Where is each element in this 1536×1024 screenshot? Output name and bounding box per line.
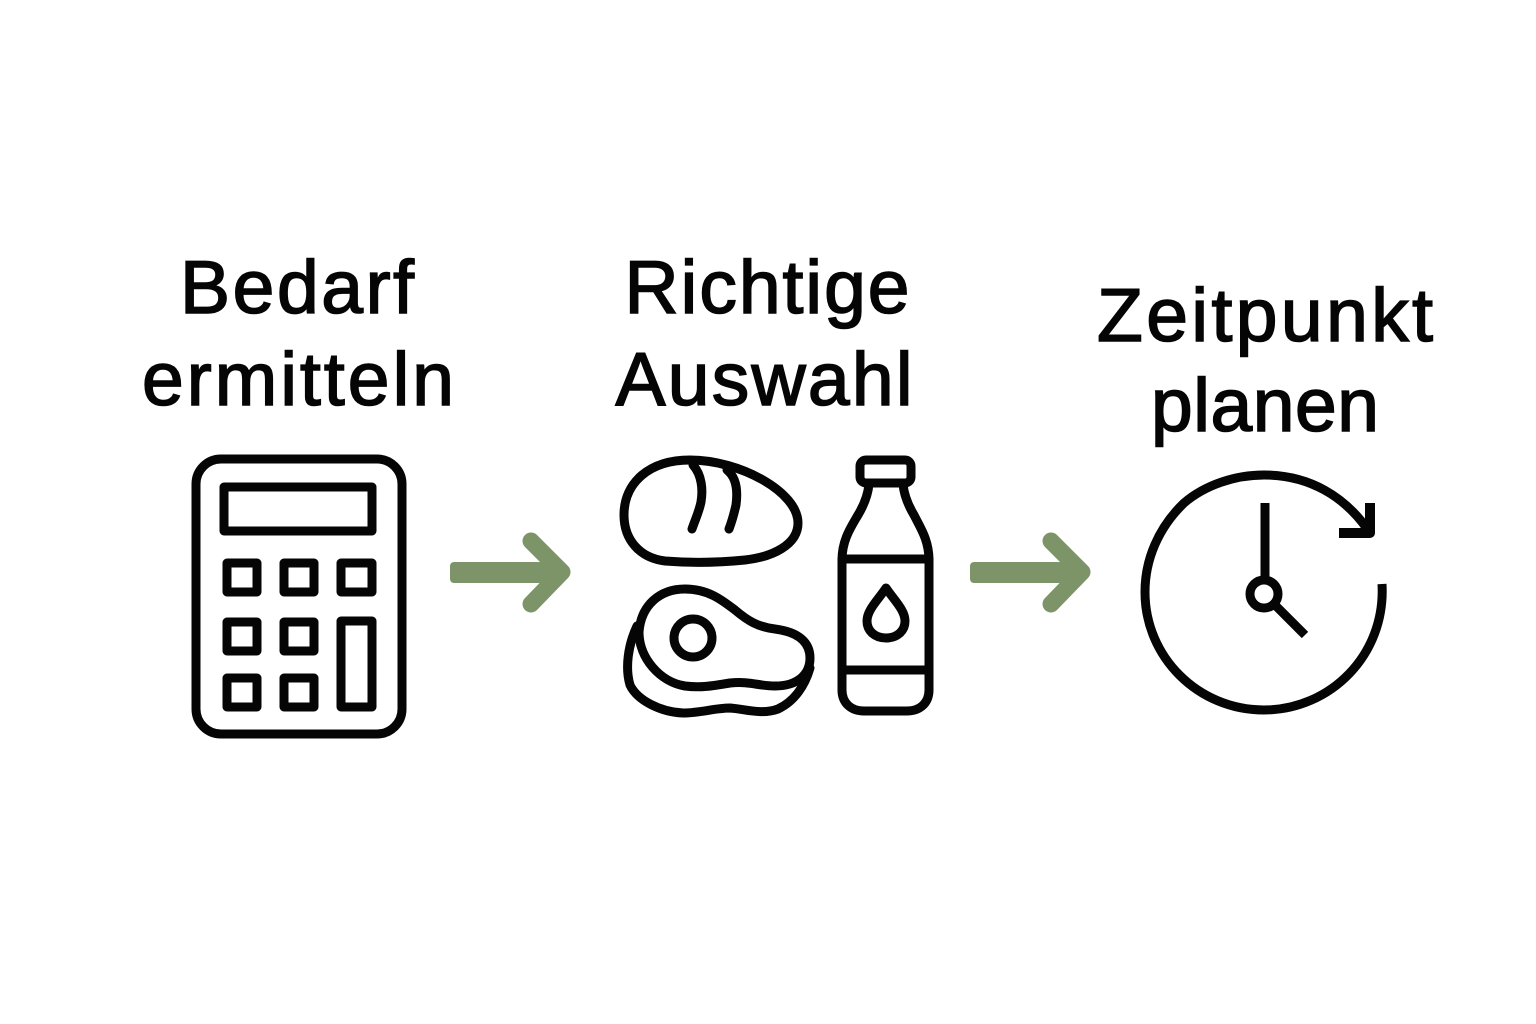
icon: bottle: [842, 460, 929, 711]
icon: calculator: [196, 459, 402, 734]
icon: clock with circular arrow: [1145, 475, 1382, 710]
arrow: step two to three: [970, 541, 1082, 604]
heading: Richtige Auswahl: Richtige: [624, 245, 910, 329]
heading: Richtige Auswahl: Auswahl: [616, 337, 912, 421]
heading: Richtige Auswahl: [616, 245, 912, 421]
arrow: step one to two: [450, 541, 562, 604]
heading: Bedarf ermitteln: Bedarf: [180, 245, 414, 329]
heading: Zeitpunkt planen: planen: [1151, 363, 1379, 447]
heading: Zeitpunkt planen: Zeitpunkt: [1097, 273, 1433, 357]
heading: Bedarf ermitteln: [142, 245, 454, 421]
heading: Bedarf ermitteln: ermitteln: [142, 337, 454, 421]
heading: Zeitpunkt planen: [1097, 273, 1433, 447]
icon: bread: [624, 460, 798, 562]
icon: steak: [628, 589, 810, 713]
